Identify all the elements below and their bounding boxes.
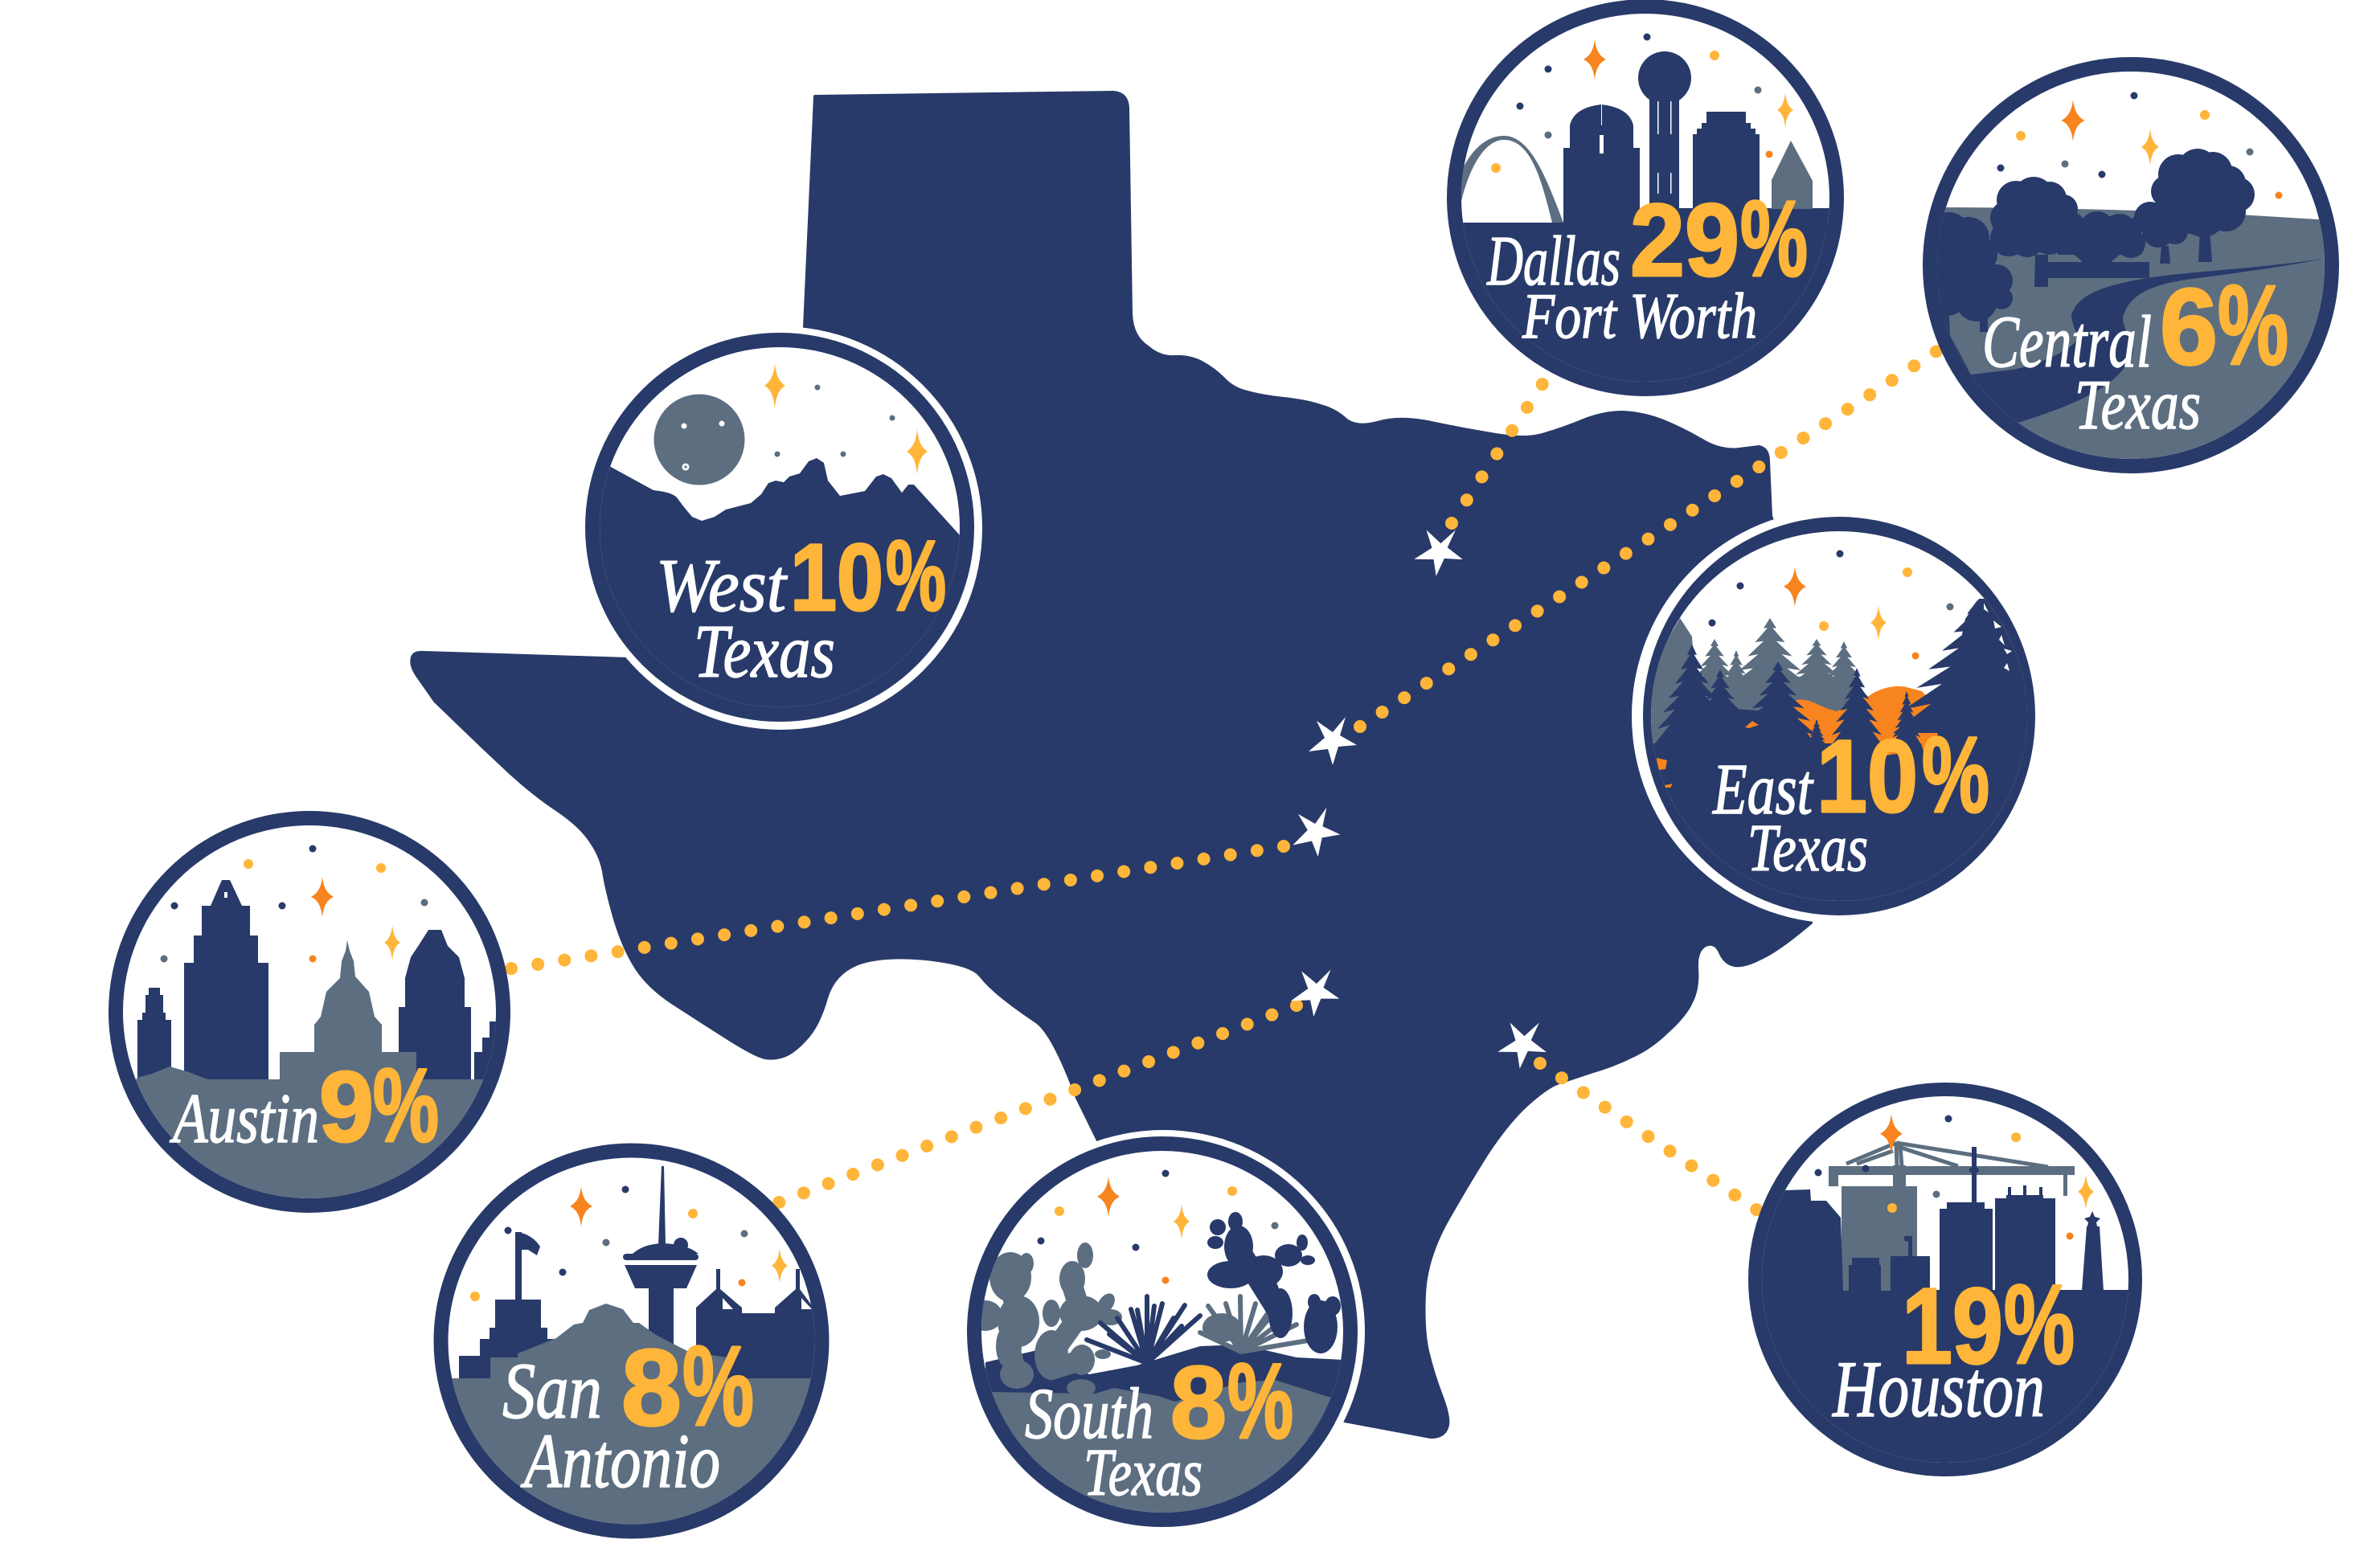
label: Fort Worth: Fort Worth (1522, 281, 1757, 352)
label: Texas: Texas (1084, 1435, 1202, 1510)
star marker: Austin (1290, 806, 1342, 858)
scene: Austin skyline and capitol (123, 825, 496, 1198)
label: San: San (502, 1346, 602, 1435)
Texas map silhouette (412, 92, 1849, 1437)
value: 19%: % (2004, 1261, 2075, 1387)
panel: Central Texas (1913, 57, 2347, 482)
label: East: East (1711, 750, 1814, 829)
label: Texas: Texas (694, 610, 835, 694)
value: 8%: % (1227, 1342, 1293, 1461)
scene: San Antonio skyline (449, 1157, 815, 1524)
scene: pine forest (1651, 531, 2027, 901)
value: 9%: % (373, 1046, 439, 1164)
value: 19%: 19 (1902, 1267, 2003, 1386)
label: Dallas: Dallas (1486, 223, 1620, 301)
label: South: South (1025, 1374, 1153, 1454)
panel: Houston (1744, 1081, 2146, 1483)
star marker: Central Texas (1309, 717, 1357, 765)
value: 10%: 10 (790, 525, 883, 631)
value: 10%: % (886, 521, 946, 632)
scene: Dallas skyline (1461, 14, 1829, 382)
star marker: San Antonio (1289, 966, 1342, 1018)
panel: Austin (109, 811, 510, 1216)
panel: East Texas (1632, 509, 2062, 923)
label: West: West (656, 544, 788, 628)
label: Antonio: Antonio (520, 1418, 720, 1504)
scene: hills, river and trees (1937, 72, 2325, 459)
value: 8%: 8 (621, 1327, 682, 1448)
label: Texas: Texas (2075, 366, 2201, 444)
value: 8%: 8 (1170, 1345, 1227, 1460)
value: 9%: 9 (319, 1052, 374, 1163)
star marker: Dallas (1412, 525, 1467, 579)
value: 6%: 6 (2160, 266, 2218, 387)
dotted connector: Dallas Fort Worth (1452, 380, 1545, 523)
panel: Dallas Fort Worth (1447, 0, 1849, 402)
panel: West Texas (579, 326, 989, 739)
value: 8%: % (682, 1322, 754, 1449)
panel: South Texas (961, 1130, 1366, 1535)
label: Austin: Austin (170, 1080, 319, 1158)
value: 29%: % (1740, 179, 1808, 299)
dotted connector: Austin (506, 846, 1284, 969)
value: 29%: 29 (1630, 183, 1739, 298)
dotted connector: Central Texas (1360, 349, 1940, 727)
label: Texas: Texas (1747, 811, 1868, 886)
scene: cacti and agave (981, 1151, 1343, 1513)
value: 6%: % (2218, 261, 2288, 388)
value: 10%: 10 (1817, 719, 1918, 834)
dotted connector: Houston (1540, 1063, 1759, 1211)
value: 10%: % (1922, 715, 1989, 835)
dotted connector: San Antonio (775, 1005, 1297, 1204)
scene: moon and mountains (600, 347, 960, 707)
panel: San Antonio (430, 1141, 836, 1543)
scene: Houston skyline and port crane (1762, 1096, 2128, 1463)
star marker: Houston (1496, 1017, 1551, 1072)
label: Houston: Houston (1831, 1345, 2045, 1434)
label: Central: Central (1982, 301, 2152, 383)
